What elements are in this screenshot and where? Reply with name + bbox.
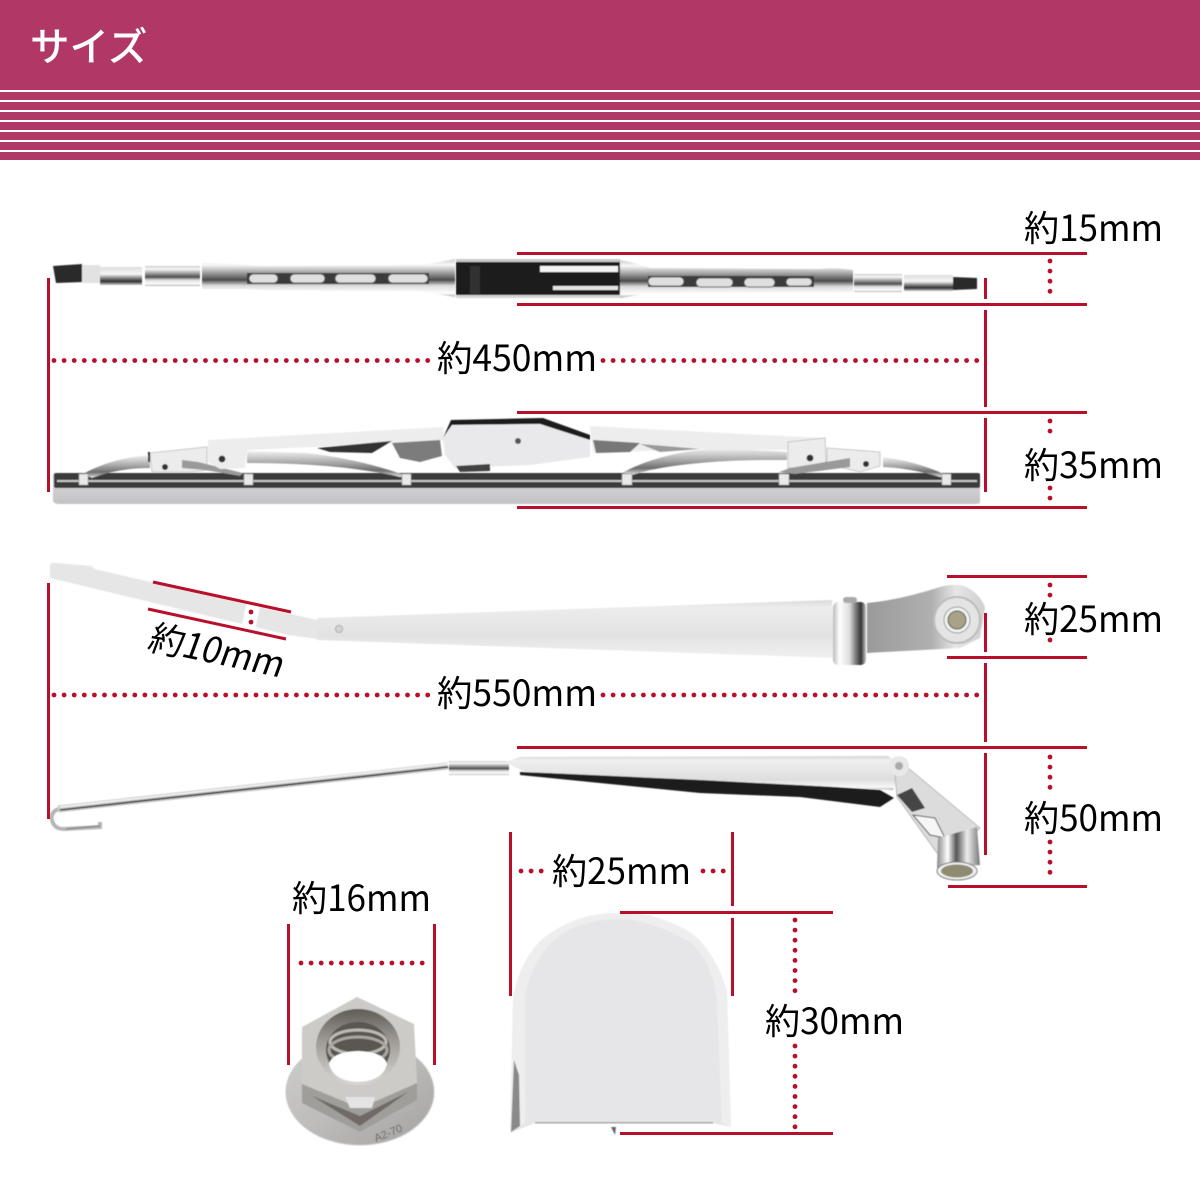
wiper arm: top view <box>50 563 985 665</box>
dotted measures <box>54 261 1050 1127</box>
label: 550mm: 約550mm <box>437 665 597 717</box>
label: 16mm: 約16mm <box>292 870 431 922</box>
dimension lines <box>48 254 1087 1134</box>
nut <box>286 997 434 1145</box>
label: 30mm: 約30mm <box>765 993 904 1045</box>
label: 15mm: 約15mm <box>1024 200 1163 252</box>
end cap <box>510 913 731 1135</box>
wiper blade: top view <box>53 259 977 298</box>
title: サイズ <box>30 16 147 73</box>
header banner <box>0 0 1200 160</box>
label: 450mm: 約450mm <box>437 330 597 382</box>
nut marking: A2-70 <box>373 1123 404 1145</box>
left frame <box>83 455 150 478</box>
label: 10mm: 約10mm <box>142 610 294 688</box>
wiper blade: side view <box>53 418 980 504</box>
label: 35mm: 約35mm <box>1024 437 1163 489</box>
label: 25mm cap: 約25mm <box>552 843 691 895</box>
label: 25mm arm: 約25mm <box>1024 591 1163 643</box>
wiper arm: side view <box>52 756 980 880</box>
center plate <box>443 418 590 442</box>
right frame <box>590 426 826 453</box>
label: 50mm: 約50mm <box>1024 790 1163 842</box>
